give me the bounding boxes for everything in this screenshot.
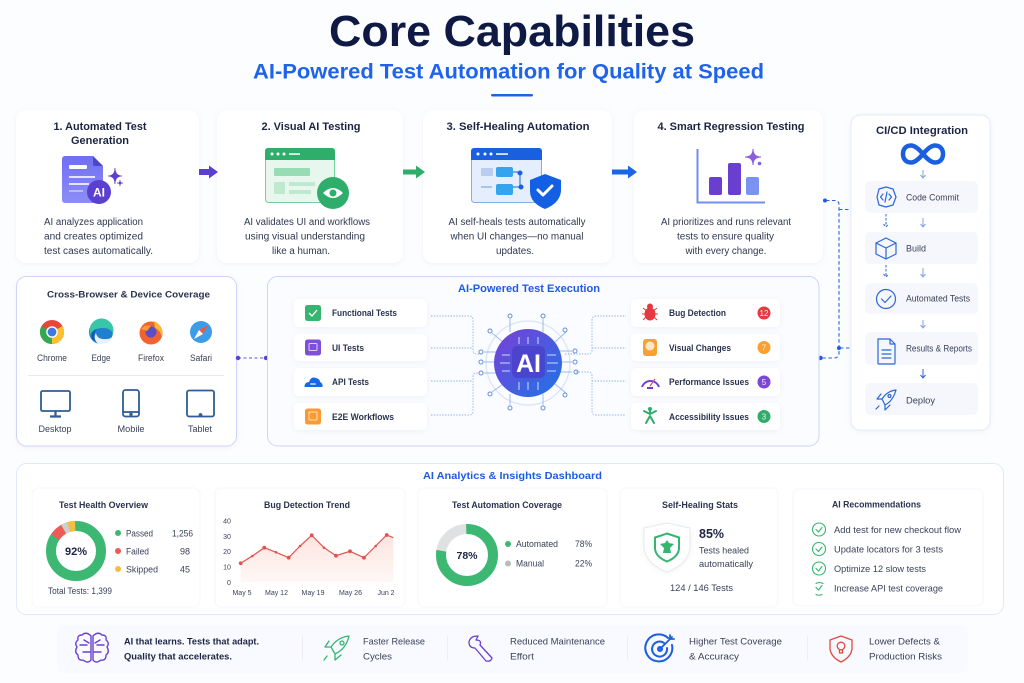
description: tests to ensure quality — [677, 232, 774, 242]
icon: brain — [76, 633, 108, 662]
right findings list: Visual Changes — [669, 343, 731, 353]
heading: 4. Smart Regression Testing — [658, 121, 804, 133]
icon: firefox — [140, 321, 162, 344]
card: bug detection trend — [215, 488, 405, 607]
description — [244, 217, 370, 257]
legend: test health: 98 — [180, 546, 190, 556]
heading: 3. Self-Healing Automation — [446, 121, 590, 133]
card: self-healing stats: 124 / 146 Tests — [670, 583, 734, 593]
right findings list: Accessibility Issues — [669, 412, 749, 422]
card: self-healing stats: Tests healed — [699, 546, 749, 556]
slogan: AI that learns. Tests that adapt. — [124, 636, 259, 648]
checklist: Add test for new checkout flow — [834, 525, 962, 535]
benefit: lower defects — [869, 636, 943, 662]
benefit: reduced maintenance: Reduced Maintenance — [510, 636, 605, 646]
line chart: 30 — [223, 534, 231, 541]
legend: coverage: Automated — [516, 539, 558, 549]
benefit: test coverage — [689, 636, 782, 662]
legend: test health: Skipped — [126, 564, 158, 574]
legend: test health — [115, 528, 193, 574]
card: self-healing stats — [620, 488, 778, 607]
benefit: faster release: Faster Release — [363, 636, 425, 646]
slogan: Quality that accelerates. — [124, 652, 232, 662]
right findings list: 5 — [762, 378, 767, 387]
benefit: faster release — [363, 636, 425, 662]
benefit: lower defects: Lower Defects & — [869, 636, 940, 646]
title rule — [491, 94, 533, 96]
heading — [54, 121, 147, 147]
left test type list: UI Tests — [332, 343, 364, 353]
flow arrows — [884, 170, 926, 378]
device labels — [38, 424, 212, 434]
heading: AI Analytics & Insights Dashboard — [423, 470, 602, 482]
card: AI recommendations — [793, 489, 983, 606]
pipeline steps: Deploy — [906, 396, 936, 406]
card: AI recommendations: AI Recommendations — [832, 500, 921, 510]
slogan — [124, 636, 259, 662]
icon: wrench — [469, 636, 492, 661]
icon: target — [645, 634, 674, 661]
icon: shield with bulb — [830, 636, 852, 662]
line chart: 40 — [223, 518, 231, 526]
benefit: lower defects: Production Risks — [869, 652, 943, 662]
line chart: Jun 2 — [377, 590, 395, 597]
icon: mobile — [123, 390, 139, 416]
icon: browser with shield — [471, 148, 561, 209]
pipeline steps: Code Commit — [906, 192, 959, 202]
left test type list: Functional Tests — [332, 308, 397, 318]
heading: Generation — [71, 135, 129, 147]
icon: chrome — [40, 320, 64, 344]
heading: CI/CD Integration — [876, 125, 968, 137]
line chart: May 19 — [302, 590, 325, 597]
right findings list: 12 — [760, 309, 769, 318]
panel: cross-browser and device coverage — [16, 276, 236, 446]
browser labels: Firefox — [138, 353, 164, 363]
description: AI validates UI and workflows — [244, 217, 370, 228]
legend: test health: Failed — [126, 546, 149, 556]
line chart: 0 — [227, 580, 231, 587]
panel: automated test generation — [16, 110, 199, 263]
device labels: Desktop — [38, 424, 72, 434]
benefit: test coverage: & Accuracy — [689, 652, 740, 662]
description: like a human. — [272, 246, 330, 257]
icon: browser with eye — [265, 148, 349, 209]
checklist — [812, 523, 962, 595]
legend: test health: Passed — [126, 528, 153, 538]
legend: coverage: 78% — [575, 539, 592, 549]
heading: Cross-Browser & Device Coverage — [47, 290, 210, 300]
legend: coverage — [505, 539, 592, 568]
benefits strip — [57, 625, 968, 673]
card: test automation coverage: 78% — [456, 550, 478, 562]
icon: rocket — [324, 636, 349, 660]
checklist: Increase API test coverage — [834, 584, 943, 594]
line chart: 20 — [223, 549, 231, 556]
right findings list — [631, 299, 780, 430]
line chart: 10 — [223, 564, 231, 572]
description — [661, 217, 791, 257]
browser labels — [37, 353, 212, 363]
pipeline steps: Results & Reports — [906, 344, 972, 354]
icon: desktop — [41, 391, 70, 416]
browser labels: Chrome — [37, 353, 67, 363]
card: bug detection trend: Bug Detection Trend — [264, 500, 350, 510]
description: AI self-heals tests automatically — [448, 217, 586, 228]
connector: coverage to execution — [236, 356, 268, 360]
device labels: Mobile — [118, 424, 144, 434]
subtitle: AI-Powered Test Automation for Quality at Speed — [253, 60, 764, 84]
icon: edge — [89, 318, 114, 345]
icon: tablet — [187, 390, 214, 416]
device labels: Tablet — [188, 424, 212, 434]
heading: 2. Visual AI Testing — [262, 121, 360, 133]
description: AI prioritizes and runs relevant — [661, 217, 791, 228]
arrow: step 1 to 2 — [199, 166, 218, 178]
card: test automation coverage: Test Automation Coverage — [452, 500, 562, 510]
icon: bar chart with sparkle — [698, 149, 765, 202]
card: test automation coverage — [418, 488, 607, 607]
arrow: step 3 to 4 — [612, 166, 637, 178]
pipeline steps — [865, 181, 978, 415]
donut: test health — [51, 526, 101, 576]
benefit: reduced maintenance — [510, 636, 605, 662]
right findings list: 7 — [762, 344, 767, 352]
icon: infinity — [903, 146, 943, 162]
left test type list: E2E Workflows — [332, 412, 394, 422]
legend: coverage: 22% — [575, 558, 592, 568]
panel: AI-powered test execution — [268, 276, 819, 446]
panel: smart regression testing — [634, 110, 823, 263]
description: updates. — [496, 246, 534, 257]
AI chip core: AI — [516, 350, 541, 378]
checklist: Optimize 12 slow tests — [834, 564, 927, 574]
pipeline steps: Build — [906, 244, 926, 254]
benefit: test coverage: Higher Test Coverage — [689, 636, 782, 646]
heading: 1. Automated Test — [54, 121, 147, 133]
panel: analytics dashboard — [16, 464, 1004, 614]
description: AI analyzes application — [44, 217, 143, 228]
arrow: step 2 to 3 — [403, 166, 425, 178]
benefit: faster release: Cycles — [363, 652, 393, 662]
description: when UI changes—no manual — [450, 232, 584, 242]
heading: AI-Powered Test Execution — [458, 283, 600, 295]
icon: healing shield — [644, 523, 690, 572]
icon: safari — [190, 321, 212, 343]
left test type list: API Tests — [332, 377, 369, 387]
description: test cases automatically. — [44, 246, 153, 257]
right findings list: Performance Issues — [669, 377, 749, 387]
header — [253, 7, 764, 96]
description — [448, 217, 586, 257]
browser labels: Edge — [92, 353, 110, 363]
card: self-healing stats: automatically — [699, 559, 754, 569]
panel: visual AI testing — [217, 110, 403, 263]
card: test health overview — [32, 488, 200, 607]
card: test health overview: 92% — [65, 546, 87, 558]
card: test health overview: Total Tests: 1,399 — [48, 586, 112, 596]
benefit: reduced maintenance: Effort — [510, 652, 535, 662]
line chart: May 12 — [265, 590, 288, 597]
line chart: May 26 — [339, 590, 362, 597]
pipeline steps: Automated Tests — [906, 294, 970, 304]
legend: test health: 45 — [180, 564, 190, 574]
panel: CI/CD integration — [851, 115, 990, 430]
checklist: Update locators for 3 tests — [834, 544, 944, 554]
card: test health overview: Test Health Overview — [59, 500, 149, 510]
icon: AI document: AI — [93, 186, 105, 200]
card: self-healing stats: 85% — [699, 526, 724, 541]
donut: coverage — [441, 529, 493, 581]
connector: CI/CD to execution — [818, 198, 850, 360]
description — [44, 217, 153, 257]
description: and creates optimized — [44, 232, 143, 242]
description: with every change. — [685, 246, 766, 257]
line chart: May 5 — [232, 590, 252, 597]
legend: coverage: Manual — [516, 558, 544, 568]
left test type list — [294, 299, 427, 430]
panel: self-healing automation — [423, 110, 612, 263]
description: using visual understanding — [245, 232, 365, 242]
icon: AI document — [62, 156, 123, 204]
left connectors — [431, 316, 481, 415]
right findings list: 3 — [762, 412, 767, 422]
card: self-healing stats: Self-Healing Stats — [662, 500, 738, 510]
title: Core Capabilities — [329, 7, 695, 56]
browser labels: Safari — [190, 353, 212, 363]
right connectors — [565, 316, 626, 415]
line chart — [223, 518, 395, 597]
right findings list: Bug Detection — [669, 308, 726, 318]
AI chip core — [479, 314, 578, 410]
legend: test health: 1,256 — [172, 528, 193, 538]
